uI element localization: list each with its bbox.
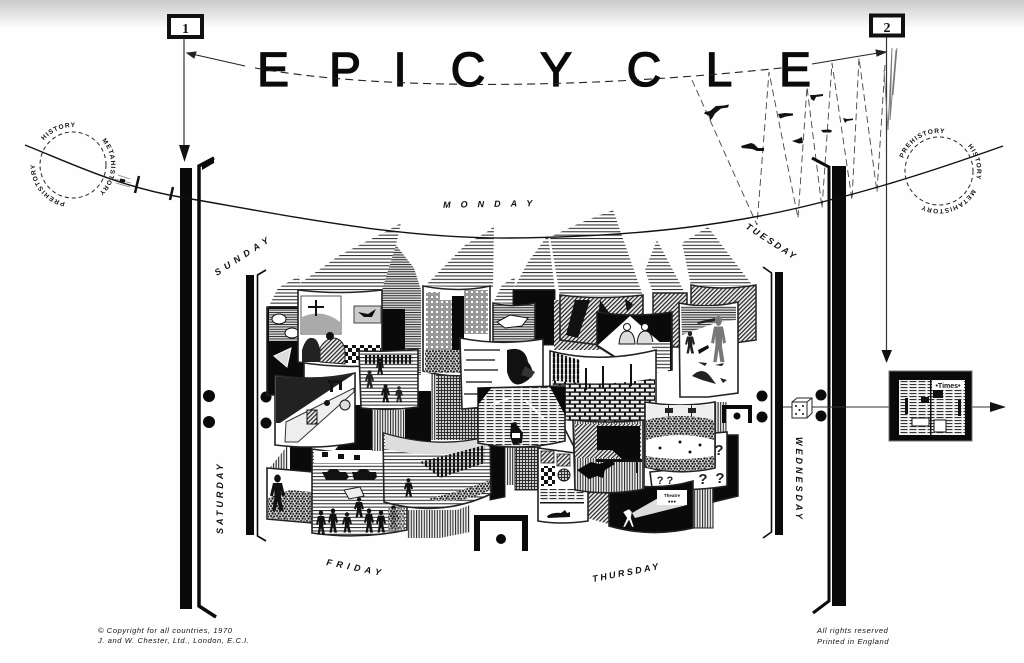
rights note xyxy=(816,626,889,646)
icon: dice xyxy=(792,398,812,418)
framed newspaper xyxy=(889,371,972,441)
box 1 with arrow xyxy=(169,16,202,162)
day labels: SATURDAY xyxy=(215,461,225,534)
big floor bracket with dot xyxy=(474,515,528,551)
box 2 with arrow xyxy=(871,16,903,363)
day labels xyxy=(213,198,804,584)
panel: tanks and protesters xyxy=(312,449,407,536)
right ring: prehistory history metahistory: METAHISTORY xyxy=(921,190,976,214)
box 1 with arrow: 1 xyxy=(182,22,189,37)
panel: skyscrapers xyxy=(423,286,490,376)
falling figures xyxy=(704,94,853,151)
panel: cinema projector xyxy=(609,481,693,533)
panel: overturned table scene xyxy=(275,373,355,447)
left ring: history metahistory prehistory: METAHISTORY xyxy=(100,138,116,196)
panel: cinema projector: ●●● xyxy=(668,499,676,504)
rights note: All rights reserved xyxy=(816,626,889,635)
panel: gallery with two viewers xyxy=(298,290,382,366)
small bracket and dot at right xyxy=(722,405,752,423)
copyright note: J. and W. Chester, Ltd., London, E.C.I. xyxy=(97,636,250,645)
panel: question marks: ? xyxy=(715,470,725,487)
panel: parade of troops xyxy=(383,433,491,508)
panel: shipwreck xyxy=(493,303,535,342)
right ring: prehistory history metahistory: HISTORY xyxy=(968,144,982,180)
title: EPICYCLE: EPICYCLE xyxy=(257,44,811,97)
box 2 with arrow: 2 xyxy=(884,21,890,36)
output arrow through dice and newspaper xyxy=(783,402,1006,412)
copyright note xyxy=(97,626,250,645)
right ring: prehistory history metahistory xyxy=(899,128,982,214)
right bar and bracket xyxy=(812,158,846,613)
panel: figures in a hall xyxy=(359,349,418,409)
panel: cinema projector: Theatre xyxy=(664,493,681,498)
panel: two men on stage xyxy=(597,312,672,373)
wire xyxy=(25,145,1003,238)
zig-zag dashed camera paths xyxy=(692,48,897,225)
inner left bracket xyxy=(246,270,266,541)
panel: puzzles and reclining figure xyxy=(538,448,588,523)
left ring: history metahistory prehistory: PREHISTORY xyxy=(30,165,65,206)
panel: question marks: ? xyxy=(698,471,708,488)
day labels: SUNDAY xyxy=(213,233,275,278)
panel: man with outstretched arm xyxy=(679,302,738,397)
panel: brick wall xyxy=(550,350,656,445)
panel: piano and fallen pianist xyxy=(573,420,644,493)
paired dots xyxy=(203,390,826,428)
inner right bracket xyxy=(763,267,783,538)
dashed arc with arrows under title xyxy=(187,50,886,84)
rights note: Printed in England xyxy=(817,637,889,646)
left ring: history metahistory prehistory xyxy=(30,122,116,206)
panel: striped fabric xyxy=(560,295,643,345)
panel: stadium xyxy=(645,402,715,472)
panel: question marks: ? xyxy=(714,442,724,459)
day labels: MONDAY xyxy=(443,198,542,210)
panel: far left maps and triangle xyxy=(267,307,304,395)
panel: question marks: ? ? xyxy=(657,475,674,487)
right ring: prehistory history metahistory: PREHISTORY xyxy=(899,128,944,158)
copyright note: © Copyright for all countries, 1970 xyxy=(98,626,233,635)
framed newspaper: •Times• xyxy=(935,383,961,390)
left bar and bracket xyxy=(180,157,216,617)
panel: written page and hand xyxy=(460,338,543,409)
panel: spectators far lower left xyxy=(267,468,313,523)
panel: newspaper and bottle xyxy=(478,386,565,447)
scene: roofs and back columns xyxy=(268,210,756,538)
day labels: WEDNESDAY xyxy=(794,437,804,522)
day labels: TUESDAY xyxy=(744,221,800,262)
day labels: FRIDAY xyxy=(326,557,386,578)
panel: question marks xyxy=(650,432,727,490)
clips on the wire xyxy=(115,175,173,200)
day labels: THURSDAY xyxy=(591,561,661,584)
left ring: history metahistory prehistory: HISTORY xyxy=(40,122,75,140)
